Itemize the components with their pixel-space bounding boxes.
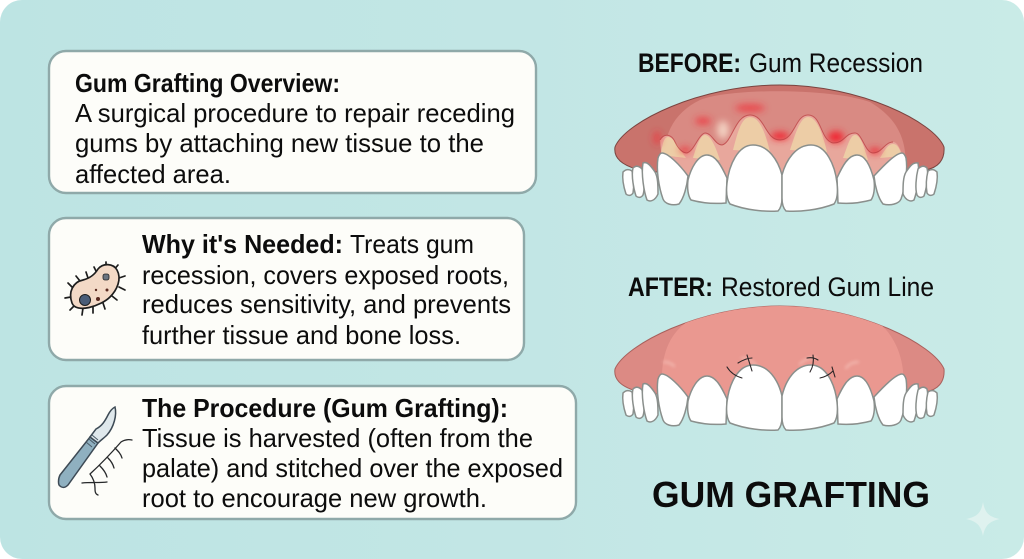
procedure text xyxy=(142,423,563,513)
gum margin xyxy=(660,115,893,153)
overview text: gums by attaching new tissue to the xyxy=(75,128,484,158)
panel: the procedure xyxy=(49,386,576,519)
overview text: affected area. xyxy=(75,159,231,189)
procedure text: palate) and stitched over the exposed xyxy=(142,453,563,483)
after heading: Restored Gum Line xyxy=(721,272,934,302)
icon: sparkle xyxy=(966,502,1000,536)
why text: further tissue and bone loss. xyxy=(142,320,461,350)
gum xyxy=(615,306,944,394)
procedure text: root to encourage new growth. xyxy=(142,483,487,513)
inflammation xyxy=(653,104,881,154)
overview text: A surgical procedure to repair receding xyxy=(75,98,515,128)
icon: bacterium xyxy=(65,262,125,315)
before heading: Gum Recession xyxy=(749,48,923,78)
illustration: after restored gum line xyxy=(615,305,944,430)
lower gum and exposed roots xyxy=(660,115,903,182)
after heading xyxy=(628,272,934,302)
panel: gum grafting overview xyxy=(49,51,536,193)
stitches xyxy=(727,355,835,378)
title: GUM GRAFTING xyxy=(652,474,930,515)
before heading: BEFORE: xyxy=(638,48,741,78)
why text xyxy=(142,229,511,350)
teeth xyxy=(623,145,937,211)
overview heading: Gum Grafting Overview: xyxy=(75,68,340,98)
procedure heading: The Procedure (Gum Grafting): xyxy=(142,393,508,423)
why text: recession, covers exposed roots, xyxy=(142,260,509,290)
overview text xyxy=(75,98,515,189)
gum glow xyxy=(717,121,729,139)
gum xyxy=(615,85,944,172)
after heading: AFTER: xyxy=(628,272,713,302)
teeth xyxy=(623,365,937,430)
why heading: Why it's Needed: xyxy=(142,229,343,259)
gum highlights xyxy=(664,358,858,368)
why text: Treats gum xyxy=(350,229,474,259)
panel: why it's needed xyxy=(49,218,524,360)
icon: scalpel and stitches xyxy=(58,407,132,495)
why text: reduces sensitivity, and prevents xyxy=(142,289,511,319)
illustration: before gum recession xyxy=(615,85,944,211)
procedure text: Tissue is harvested (often from the xyxy=(142,423,533,453)
before heading xyxy=(638,48,923,78)
